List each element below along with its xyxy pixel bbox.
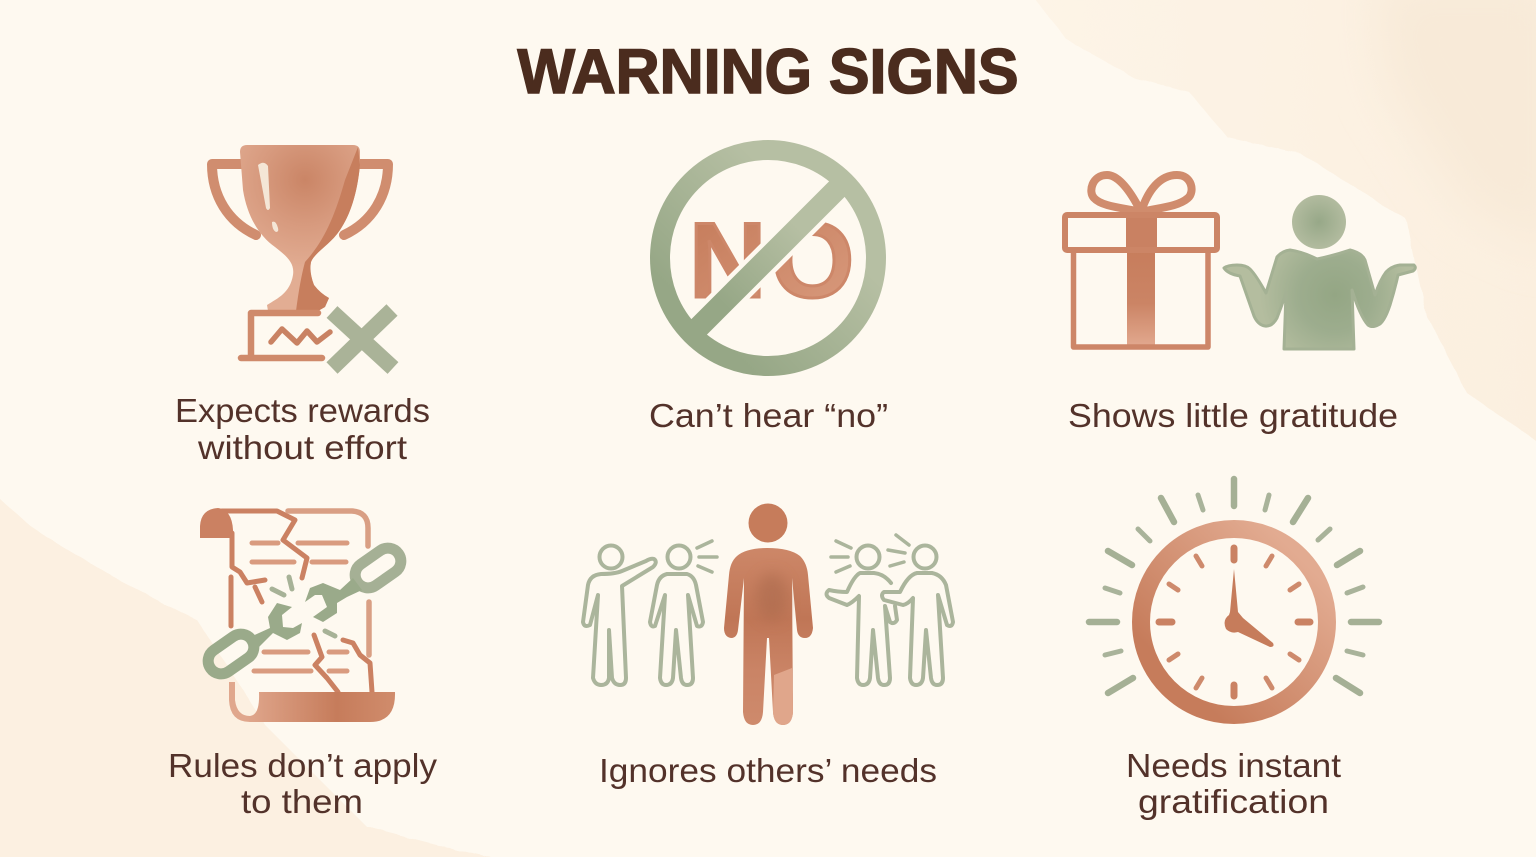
- short rays: [1105, 495, 1363, 655]
- trophy handles: [212, 164, 388, 235]
- title: WARNING SIGNS: [518, 37, 1018, 107]
- text lines on scroll: [252, 543, 347, 671]
- plaque squiggle: [271, 329, 330, 343]
- major ticks: [1159, 548, 1310, 696]
- label: Needs instant: [1126, 747, 1341, 784]
- panel: ignores others' needs: [583, 504, 953, 789]
- panel: shows little gratitude: [1065, 175, 1415, 434]
- person pointing: [583, 546, 656, 685]
- label: Ignores others’ needs: [599, 752, 937, 789]
- body: [882, 573, 953, 685]
- prohibition ring: [660, 150, 876, 366]
- head: [856, 546, 880, 568]
- minor ticks: [1169, 556, 1299, 688]
- body: [650, 574, 703, 685]
- head: [748, 504, 788, 542]
- trophy cup: [240, 145, 360, 311]
- panel: needs instant gratification: [1089, 479, 1379, 820]
- label: [1126, 747, 1341, 820]
- body: [724, 548, 813, 725]
- body: [1224, 250, 1415, 349]
- speech lines right: [831, 535, 909, 572]
- head: [1292, 195, 1346, 249]
- scroll right edge: [288, 511, 369, 655]
- scroll curl: [200, 508, 233, 538]
- body: [583, 559, 656, 685]
- trophy shaded side: [296, 147, 360, 311]
- chain fragments: [272, 577, 335, 636]
- label: to them: [241, 783, 363, 820]
- icon: prohibited NO: [660, 150, 876, 366]
- trophy plinth: [241, 313, 322, 358]
- clock hands: [1225, 569, 1274, 647]
- ribbon on box: [1127, 250, 1155, 347]
- scroll bottom roll: [229, 682, 395, 722]
- label: gratification: [1138, 783, 1329, 820]
- panel: can't hear no: [649, 150, 888, 434]
- label: Rules don’t apply: [168, 747, 438, 784]
- body: [826, 573, 897, 685]
- chest shading: [756, 573, 788, 621]
- watercolor wash: top right: [1028, 0, 1536, 448]
- icon: torn scroll with broken chain: [200, 508, 406, 722]
- central figure: [724, 504, 813, 725]
- green X: [332, 310, 393, 368]
- long rays: [1089, 479, 1379, 693]
- label: [168, 747, 438, 820]
- lid: [1065, 215, 1217, 250]
- light patch on leg: [773, 668, 793, 725]
- box: [1074, 250, 1208, 347]
- head: [600, 546, 622, 568]
- person two: [650, 546, 703, 685]
- lower chain link: [203, 629, 259, 679]
- head: [668, 546, 690, 568]
- gap beside slash: [692, 182, 844, 334]
- icon: crowd around central figure: [583, 504, 953, 725]
- icon: shrugging person: [1224, 195, 1415, 349]
- icon: trophy with X: [212, 145, 393, 368]
- clock ring: [1141, 529, 1327, 715]
- label: Shows little gratitude: [1068, 397, 1398, 434]
- person three: [826, 546, 897, 685]
- speech lines left: [697, 541, 717, 572]
- label: without effort: [197, 429, 407, 466]
- label: Expects rewards: [175, 392, 430, 429]
- label: [175, 392, 430, 466]
- ribbon on lid: [1126, 216, 1157, 249]
- trophy highlight: [258, 163, 278, 232]
- lower broken hook: [250, 603, 302, 648]
- person four: [882, 546, 953, 685]
- upper broken hook: [305, 578, 362, 622]
- panel: expects rewards: [175, 145, 430, 466]
- icon: gift box: [1065, 175, 1217, 347]
- icon: clock with rays: [1089, 479, 1379, 715]
- prohibition slash: [692, 182, 844, 334]
- label: Can’t hear “no”: [649, 397, 888, 434]
- watercolor wash: bottom left: [0, 490, 530, 857]
- letters NO: NO: [689, 200, 854, 320]
- bow: [1091, 175, 1192, 212]
- panel: rules don't apply: [168, 508, 438, 820]
- head: [914, 546, 936, 568]
- scroll edges and cracks: [222, 511, 372, 692]
- upper chain link: [350, 543, 406, 593]
